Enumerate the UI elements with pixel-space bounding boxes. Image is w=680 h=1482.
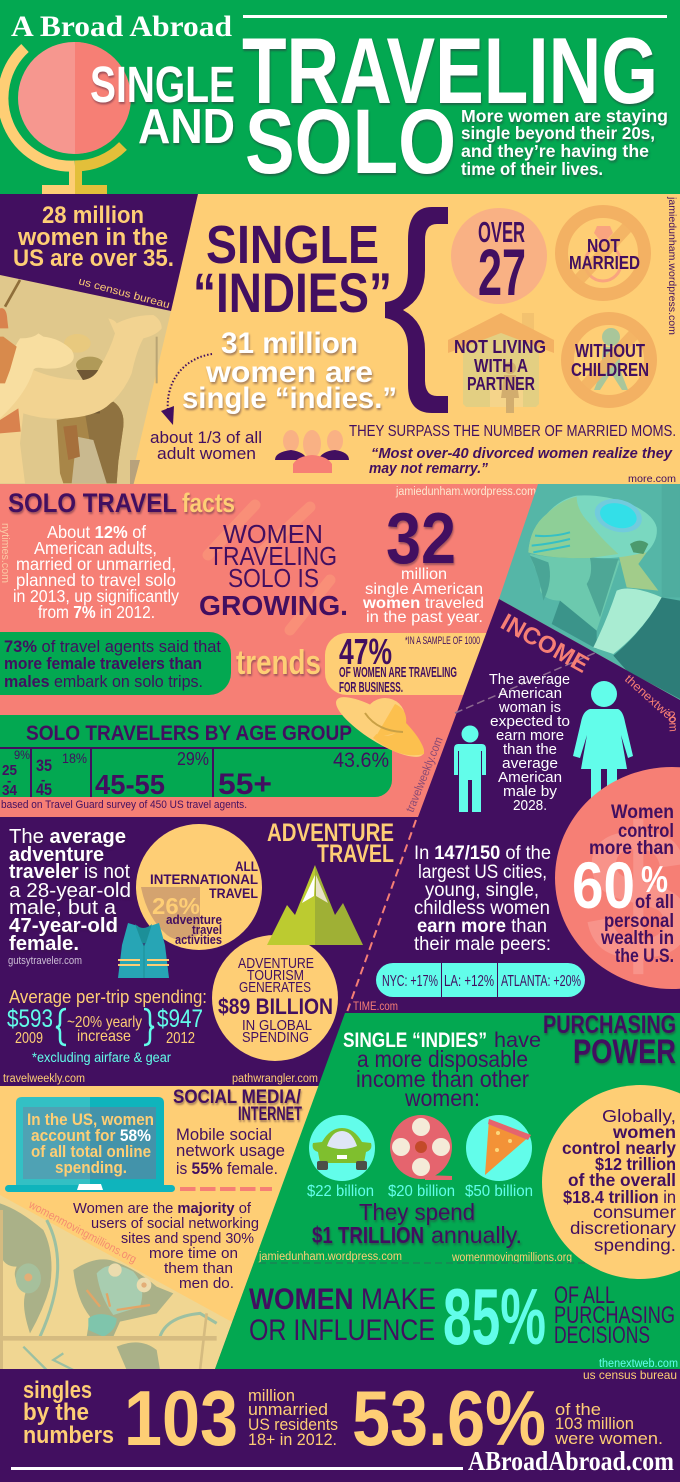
text: expected to earn more: [489, 671, 570, 814]
stat: 53.6 percent: 53.6%: [352, 1374, 546, 1462]
title: single and traveling solo: SINGLE: [90, 56, 235, 113]
bar: 55+: 55+: [218, 768, 272, 801]
pill: 47 percent business: FOR BUSINESS.: [339, 679, 403, 696]
heading: social media internet: INTERNET: [238, 1104, 302, 1125]
callout: women control 60 percent: of all: [635, 892, 674, 913]
circle: 26 percent international: INTERNATIONAL: [150, 871, 258, 887]
text: disposable income: women:: [404, 1085, 480, 1111]
circle: 89 billion: GENERATES: [239, 979, 311, 996]
badge: not married: NOT: [587, 236, 620, 256]
text: they spend 1 trillion: $1 TRILLION: [312, 1222, 424, 1248]
icon: laptop with online spending: In the US, women: [27, 1110, 154, 1129]
pill: city earnings: ATLANTA: +20%: [501, 973, 581, 990]
logo: A Broad Abroad: A Broad Abroad: [11, 10, 232, 43]
text: disposable income: have: [494, 1029, 541, 1052]
circle: 26 percent international: adventure: [166, 912, 222, 927]
photo: ornamental wallpaper: [0, 1195, 232, 1370]
text: they spend 1 trillion: They spend: [359, 1199, 475, 1225]
circle: 89 billion: $89 BILLION: [218, 994, 333, 1019]
text: expected to earn more: average: [502, 755, 558, 772]
heading: trends: trends: [236, 644, 321, 682]
badge: over 27: 27: [478, 235, 526, 309]
heading: singles by the numbers: numbers: [23, 1422, 114, 1449]
callout: 28 million women: women in the: [17, 224, 168, 251]
icon: sun hat: [329, 687, 431, 767]
quote: may not remarry.”: [369, 460, 488, 477]
heading: social media internet: SOCIAL MEDIA/: [173, 1087, 302, 1108]
circle: 89 billion: ADVENTURE: [238, 955, 314, 972]
stat: 103 million: million: [248, 1386, 295, 1405]
text: 12 percent: from 7% in 2012.: [38, 602, 155, 622]
stat: 32 million: 32: [386, 499, 456, 579]
bar: 45-55: [95, 749, 209, 800]
text: majority of users: sites and spend 30%: [121, 1231, 254, 1247]
badge: not living with a partner: WITH A: [474, 356, 528, 376]
stat: 53.6 percent: were women.: [554, 1429, 663, 1448]
pill: city earnings: NYC: +17%: [382, 973, 438, 990]
callout: 28 million women: [0, 194, 198, 311]
text: women traveling solo is growing: [199, 505, 348, 630]
callout: 28 million women: US are over 35.: [13, 245, 174, 272]
circle: 26 percent international: ALL: [235, 858, 258, 874]
text: 147 of 150 cities: their male peers:: [414, 934, 551, 955]
callout: women control 60 percent: %: [641, 859, 668, 900]
text: about one third: about 1/3 of all: [150, 428, 262, 447]
circle: 12 trillion: discretionary: [570, 1218, 676, 1238]
pill: 47 percent business: *IN A SAMPLE OF 1000: [405, 635, 480, 647]
icon: car: [309, 1115, 375, 1181]
sources: jamiedunham.wordpress.com: [258, 1251, 402, 1263]
text: majority of users: users of social networking: [91, 1216, 259, 1232]
text: expected to earn more: woman is: [498, 699, 561, 716]
sources: [258, 1251, 572, 1264]
text: majority of users: them than: [164, 1261, 233, 1277]
text: 147 of 150 cities: In 147/150 of the: [414, 843, 551, 864]
panel: income: [454, 609, 680, 814]
badge: without children: WITHOUT: [575, 341, 645, 361]
badge: not married: [562, 212, 644, 294]
labels: spending amounts: $50 billion: [465, 1183, 533, 1200]
bar: 35-45: 35: [36, 756, 52, 775]
text: average adventure traveler: [9, 826, 131, 955]
text: 147 of 150 cities: childless women: [414, 898, 550, 919]
photo: woman with headscarf: [499, 484, 680, 700]
icon: laptop with online spending: [5, 1097, 175, 1192]
stat: 32 million: single American: [365, 581, 483, 598]
source: pathwrangler: pathwrangler.com: [232, 1073, 318, 1085]
callout: women control 60 percent: 60: [572, 848, 635, 922]
text: women traveling solo is growing: GROWING.: [199, 590, 348, 621]
text: 12 percent: married or unmarried,: [16, 554, 176, 574]
quote: [369, 445, 673, 477]
pill: 73 percent of travel agents: 73% of travel agents said that: [4, 637, 221, 656]
circle: 12 trillion: $12 trillion: [595, 1154, 676, 1174]
labels: spending amounts: $20 billion: [388, 1183, 455, 1200]
bar: 55+: [218, 749, 389, 801]
heading: solo travel facts: SOLO TRAVEL: [8, 488, 177, 518]
badge: without children: CHILDREN: [571, 360, 649, 380]
bar: 45-55: 29%: [177, 749, 209, 769]
icon: curly brace: [385, 207, 448, 413]
source: travelweekly diagonal: travelweekly.com: [403, 735, 446, 814]
icon: laptop with online spending: spending.: [55, 1158, 127, 1177]
badge: over 27: [451, 208, 547, 309]
title: single and traveling solo: [90, 18, 658, 193]
title: single and traveling solo: AND: [138, 100, 235, 154]
divider dashed: [455, 652, 597, 713]
text: expected to earn more: The average: [489, 671, 570, 688]
text: average adventure traveler: a 28-year-old: [9, 880, 131, 902]
heading: solo travel facts: facts: [182, 488, 235, 518]
text: average adventure traveler: traveler is not: [9, 861, 130, 883]
badge: without children: [568, 318, 650, 402]
circle: 12 trillion: of the overall: [568, 1170, 676, 1190]
text: disposable income: SINGLE “INDIES”: [343, 1029, 487, 1052]
text: about one third: [150, 428, 262, 463]
panel: singles by the numbers: [0, 1368, 680, 1482]
text: 147 of 150 cities: young, single,: [425, 880, 539, 901]
text: expected to earn more: American: [498, 685, 562, 702]
stat: 103 million: [124, 1374, 338, 1462]
pill: city earnings: [376, 963, 585, 997]
circle: 26 percent international: 26%: [152, 893, 200, 919]
text: expected to earn more: expected to: [490, 713, 570, 730]
circle: 26 percent international: [136, 824, 262, 950]
text: 12 percent: in 2013, up significantly: [13, 586, 179, 606]
bar: 45-55: 45-55: [95, 769, 165, 800]
heading: adventure travel: TRAVEL: [317, 840, 394, 868]
subtitle: single beyond their 20s,: [461, 123, 655, 143]
text: mobile social: network usage: [176, 1141, 285, 1160]
icon: mountain: [267, 865, 363, 945]
callout: women control 60 percent: more than: [589, 838, 674, 859]
bar: 25-34: [2, 748, 30, 799]
circle: 12 trillion: consumer: [593, 1202, 676, 1222]
text: mobile social: Mobile social: [176, 1125, 272, 1144]
badge: not living with a partner: PARTNER: [467, 374, 535, 394]
circle: 12 trillion: $18.4 trillion in: [563, 1187, 676, 1207]
source: more.com: more.com: [628, 474, 676, 485]
text: expected to earn more: American: [498, 769, 562, 786]
sources: womenmovingmillions.org: [451, 1252, 572, 1264]
circle: 12 trillion: women: [612, 1122, 676, 1142]
pill: city earnings: LA: +12%: [444, 973, 494, 990]
circle: 26 percent international: TRAVEL: [209, 885, 258, 901]
source: jamiedunham vertical: jamiedunham.wordpress.com: [666, 196, 678, 335]
stat: 31 million: [182, 327, 397, 415]
panel: header: [0, 0, 680, 194]
text: per-trip spending: [7, 987, 207, 1065]
bar: 35-45: -: [41, 772, 45, 787]
stat: 31 million: women are: [205, 356, 373, 389]
circle: 89 billion: IN GLOBAL: [242, 1017, 312, 1034]
text: they spend 1 trillion: annually.: [431, 1222, 522, 1248]
icon: male figure: [454, 726, 486, 812]
source: thenextweb: thenextweb: [622, 672, 680, 727]
photo: camels: [0, 275, 171, 485]
icon: three women: [275, 430, 349, 473]
icon: pizza slice: [466, 1115, 532, 1181]
badge: over 27: OVER: [478, 217, 525, 249]
text: per-trip spending: $947: [157, 1005, 203, 1033]
stat: 85 percent: OR INFLUENCE: [249, 1314, 435, 1347]
source: time.com: TIME.com: [353, 1001, 398, 1013]
panel: purchasing power: [215, 1011, 680, 1370]
text: per-trip spending: Average per-trip spending:: [9, 987, 207, 1007]
stat: 32 million: [362, 499, 484, 626]
circle: 12 trillion: [542, 1085, 680, 1279]
pill: 47 percent business: OF WOMEN ARE TRAVELING: [339, 664, 457, 681]
icon: laptop with online spending: account for 58%: [31, 1126, 151, 1145]
stat: 85 percent: WOMEN MAKE: [249, 1283, 436, 1316]
text: mobile social: is 55% female.: [176, 1159, 278, 1178]
stat: 85 percent: OF ALL: [554, 1282, 615, 1309]
text: disposable income: a more disposable: [357, 1046, 528, 1072]
stat: 31 million: single “indies.”: [182, 382, 397, 415]
panel: income and adventure background: [0, 599, 680, 1086]
panel: single indies: [0, 194, 680, 485]
text: average adventure traveler: The average: [9, 826, 126, 848]
badge: not living with a partner: NOT LIVING: [454, 337, 546, 357]
text: 12 percent: American adults,: [34, 538, 157, 558]
quote: “Most over-40 divorced women realize they: [371, 445, 673, 462]
stat: 32 million: women traveled: [362, 595, 484, 612]
subtitle: More women are staying: [461, 106, 668, 126]
text: average adventure traveler: female.: [9, 933, 79, 955]
callout: women control 60 percent: Women: [611, 802, 674, 823]
text: expected to earn more: male by: [503, 783, 558, 800]
pill: 73 percent of travel agents: males embark on solo trips.: [4, 672, 203, 691]
pill: 47 percent business: [325, 631, 500, 696]
source: womenmovingmillions diagonal: womenmovingmillions.org: [26, 1199, 138, 1266]
pill: 73 percent of travel agents: more female travelers than: [4, 654, 202, 673]
bar: 35-45: 45: [36, 780, 52, 799]
text: per-trip spending: $593: [7, 1005, 53, 1033]
bar: 55+: 43.6%: [333, 749, 389, 772]
chart: solo travelers by age group: [0, 715, 392, 801]
text: majority of users: men do.: [179, 1276, 234, 1292]
icon: life vest: [118, 923, 169, 978]
panel: adventure travel: [3, 819, 394, 1085]
stat: 32 million: million: [401, 566, 447, 583]
labels: spending amounts: [307, 1183, 533, 1200]
circle: 26 percent international: activities: [175, 932, 222, 947]
stat: 85 percent: [249, 1272, 675, 1361]
badge: not married: MARRIED: [569, 253, 640, 273]
source: gutsytraveler: gutsytraveler.com: [8, 955, 82, 967]
text: 12 percent: planned to travel solo: [16, 570, 176, 590]
circle: 26 percent international: travel: [192, 922, 222, 937]
text: per-trip spending: increase: [77, 1028, 131, 1045]
callout: 28 million women: 28 million: [42, 202, 144, 229]
circle: 12 trillion: Globally,: [602, 1106, 676, 1126]
bar: 35-45: [36, 750, 87, 799]
text: majority of users: Women are the majority of: [73, 1201, 252, 1217]
note: survey base: based on Travel Guard survey of 450 US travel agents.: [1, 799, 247, 811]
heading: singles by the numbers: by the: [23, 1399, 89, 1426]
bar: 35-45: 18%: [62, 750, 87, 766]
bar: 25-34: 25: [2, 762, 17, 779]
text: expected to earn more: earn more: [496, 727, 564, 744]
subtitle: and they’re having the: [461, 141, 649, 161]
stat: 85 percent: 85%: [443, 1272, 546, 1361]
badge: not living with a partner: [448, 313, 554, 413]
icon: laptop with online spending: of all total online: [31, 1142, 151, 1161]
text: per-trip spending: ~20% yearly: [67, 1014, 142, 1031]
callout: women control 60 percent: [555, 767, 680, 1001]
text: disposable income: [343, 1029, 541, 1111]
pill: 73 percent of travel agents: [0, 632, 231, 695]
heading: single indies: [193, 215, 392, 324]
panel: solo travel facts: [0, 484, 680, 818]
text: they spend 1 trillion: [312, 1199, 522, 1248]
heading: social media internet: [173, 1087, 302, 1125]
circle: 89 billion: SPENDING: [242, 1029, 309, 1046]
heading: adventure travel: [267, 819, 394, 868]
text: 147 of 150 cities: [414, 843, 551, 955]
text: disposable income: income than other: [356, 1066, 529, 1092]
text: expected to earn more: 2028.: [513, 797, 547, 814]
text: average adventure traveler: adventure: [9, 844, 104, 866]
chart: solo travelers by age group: SOLO TRAVELERS BY AGE GROUP: [26, 722, 352, 745]
icon: female figure: [573, 681, 633, 814]
text: 147 of 150 cities: largest US cities,: [418, 862, 547, 883]
icon: film reel: [390, 1115, 452, 1180]
circle: 89 billion: [212, 935, 338, 1061]
stat: 103 million: US residents: [248, 1415, 338, 1434]
callout: women control 60 percent: wealth in: [600, 928, 674, 949]
text: expected to earn more: than the: [503, 741, 557, 758]
text: average adventure traveler: male, but a: [9, 897, 117, 919]
pill: 47 percent business: 47%: [339, 631, 392, 672]
stat: 31 million: 31 million: [221, 327, 358, 360]
text: women traveling solo is growing: TRAVELING: [209, 541, 337, 571]
text: about one third: adult women: [157, 444, 256, 463]
subtitle: [461, 106, 668, 179]
circle: 89 billion: TOURISM: [247, 967, 304, 984]
stat: 103 million: 103: [124, 1374, 238, 1462]
text: women traveling solo is growing: WOMEN: [223, 519, 323, 549]
title: single and traveling solo: SOLO: [245, 91, 456, 193]
panel: social media: [0, 1086, 319, 1370]
heading: single indies: “INDIES”: [193, 261, 392, 324]
text: 12 percent: About 12% of: [47, 522, 146, 542]
text: mobile social: [176, 1125, 285, 1178]
heading: adventure travel: ADVENTURE: [267, 819, 394, 847]
text: 147 of 150 cities: earn more than: [417, 916, 547, 937]
bar: 25-34: 9%: [14, 748, 30, 762]
text: per-trip spending: 2009: [15, 1030, 43, 1047]
stat: 103 million: unmarried: [248, 1400, 328, 1419]
text: women traveling solo is growing: SOLO IS: [228, 563, 319, 593]
heading: income: INCOME: [496, 609, 593, 679]
text: majority of users: more time on: [149, 1246, 238, 1262]
bar: 25-34: 34: [2, 782, 18, 799]
stat: 32 million: in the past year.: [366, 609, 483, 626]
bar: 25-34: -: [7, 773, 11, 788]
heading: single indies: SINGLE: [206, 215, 379, 275]
arrow: dotted: [161, 354, 212, 425]
stat: 103 million: 18+ in 2012.: [248, 1430, 337, 1449]
heading: singles by the numbers: [23, 1377, 114, 1449]
heading: purchasing power: [543, 1011, 676, 1071]
stat: 53.6 percent: of the: [555, 1400, 601, 1419]
source: census: us census bureau: [583, 1368, 677, 1382]
icon: globe: [3, 42, 131, 194]
text: majority of users: [73, 1201, 259, 1292]
stat: 53.6 percent: 103 million: [555, 1414, 634, 1433]
callout: 28 million women: us census bureau: [77, 275, 171, 311]
labels: spending amounts: $22 billion: [307, 1183, 374, 1200]
text: average adventure traveler: 47-year-old: [9, 915, 118, 937]
circle: 12 trillion: spending.: [594, 1235, 676, 1255]
text: per-trip spending: 2012: [166, 1030, 195, 1047]
subtitle: time of their lives.: [461, 159, 603, 179]
source: jamiedunham: jamiedunham.wordpress.com: [395, 486, 536, 498]
heading: singles by the numbers: singles: [23, 1377, 92, 1404]
text: per-trip spending: *excluding airfare & gear: [32, 1050, 171, 1065]
text: 12 percent: [13, 522, 179, 622]
circle: 12 trillion: control nearly: [562, 1138, 676, 1158]
source: travelweekly: travelweekly.com: [3, 1073, 85, 1085]
divider: dashed diagonal: [347, 820, 416, 1012]
